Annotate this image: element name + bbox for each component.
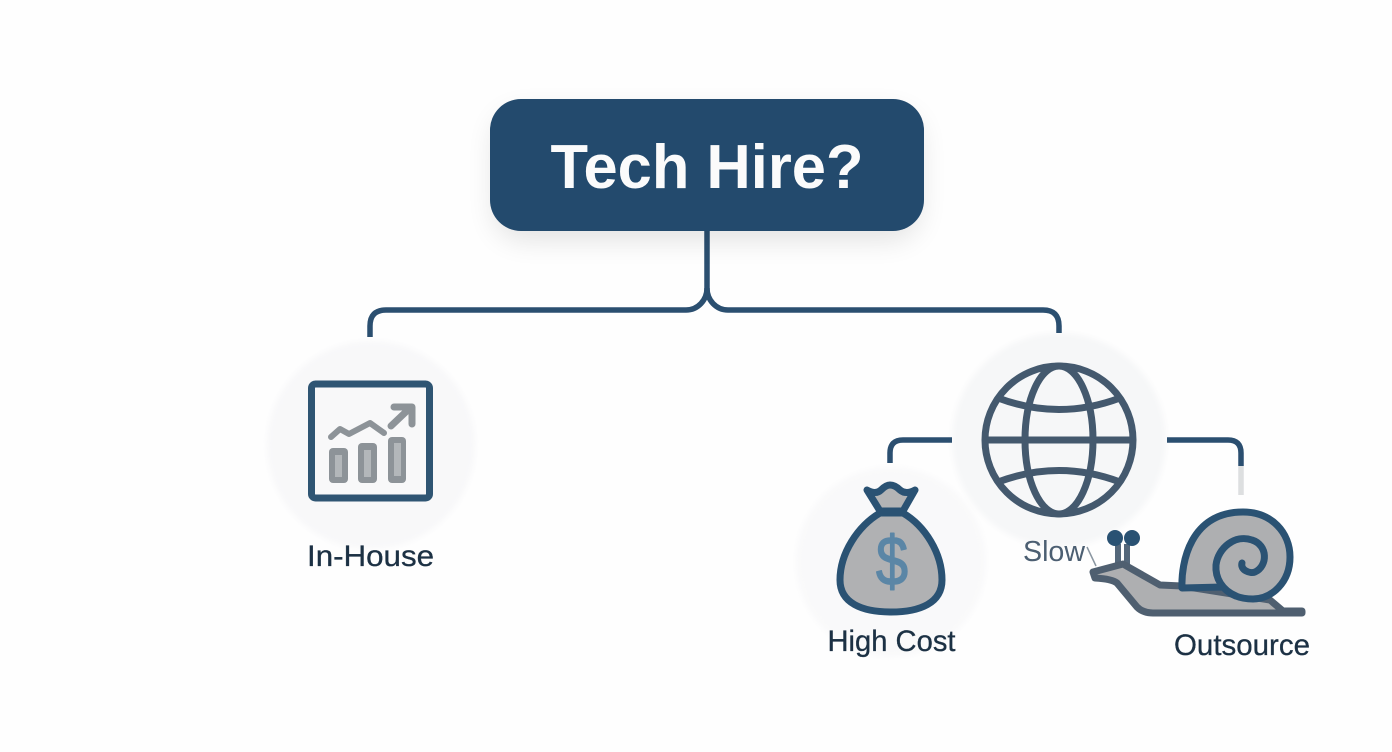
icon: globe [985, 366, 1133, 514]
circle backdrop: Outsource globe [952, 333, 1166, 547]
connector: globe to High Cost [890, 440, 952, 463]
icon: dollar sign: $ [876, 522, 908, 600]
circle backdrop: In-House [267, 341, 475, 549]
icon: growth chart [312, 384, 430, 498]
connector: main branches [370, 231, 1059, 337]
connector: globe to Slow snail [1167, 440, 1241, 495]
label: Outsource: Outsource [1174, 629, 1310, 662]
circle backdrop: High Cost [796, 467, 986, 657]
label: High Cost: High Cost [828, 625, 956, 658]
decision box: Tech Hire? [490, 99, 924, 240]
label: In-House: In-House [307, 540, 434, 573]
title: Tech Hire? [550, 133, 864, 202]
icon: snail [1087, 512, 1302, 613]
label: Slow: Slow [1023, 536, 1086, 568]
icon: money bag [840, 485, 942, 612]
